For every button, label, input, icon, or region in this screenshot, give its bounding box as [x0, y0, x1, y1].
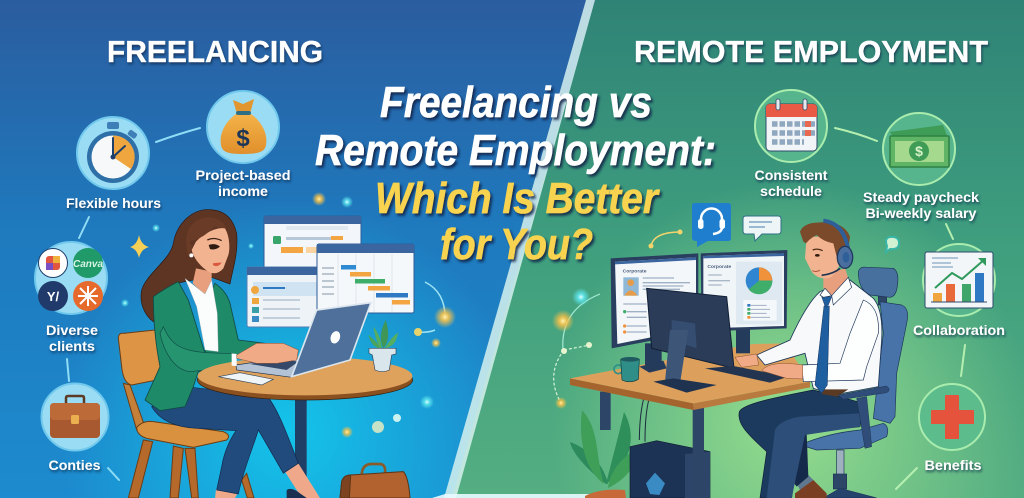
label: collaboration: Collaboration	[913, 322, 1005, 338]
label: benefits: Benefits	[924, 457, 982, 473]
bag on floor	[340, 464, 410, 498]
man: shirt	[757, 280, 882, 395]
heading: Freelancing: FREELANCING	[107, 34, 323, 69]
monitor: left: Corporate	[623, 269, 647, 275]
main title: for You?	[440, 220, 593, 269]
label: conties: Conties	[48, 457, 101, 473]
monitor: right: Corporate	[707, 264, 731, 270]
chair	[118, 330, 254, 498]
app window: top browser	[264, 216, 361, 276]
monitor: front rear view	[647, 288, 734, 393]
man: hands	[735, 354, 803, 379]
monitor: left	[611, 253, 698, 348]
woman: pants	[152, 387, 298, 494]
woman: neck	[193, 268, 212, 295]
potted plant	[368, 320, 398, 372]
icon: diverse client logos: Canva	[73, 259, 103, 270]
man: sock and shoe	[795, 473, 827, 498]
phone	[218, 373, 273, 385]
man: hair	[800, 222, 850, 257]
main title: Remote Employment:	[315, 126, 716, 175]
chair armrest	[838, 386, 889, 448]
label: consistent schedule	[754, 167, 828, 199]
icon: briefcase	[42, 384, 108, 450]
icon: medical cross	[919, 384, 985, 450]
icon: stopwatch	[77, 117, 149, 189]
label: project-based income	[196, 167, 290, 199]
laptop screen	[292, 303, 371, 377]
keyboard	[705, 366, 788, 383]
woman: blouse	[185, 278, 218, 352]
man: pants	[739, 390, 863, 498]
decorative glows right	[552, 230, 899, 409]
app window: gantt chart	[317, 244, 414, 313]
label: consistent schedule: Consistent	[754, 167, 828, 183]
computer tower	[630, 441, 710, 498]
laptop keyboard	[250, 358, 298, 370]
icon: cash	[883, 113, 955, 185]
label: diverse clients	[46, 322, 98, 354]
mug	[614, 357, 639, 382]
main title: Freelancing vs	[380, 78, 652, 127]
desk top	[570, 343, 810, 410]
laptop logo	[329, 330, 342, 345]
label: project-based income: Project-based	[196, 167, 290, 183]
man: sleeve	[802, 300, 878, 382]
label: steady paycheck bi-weekly salary: Steady paycheck	[863, 189, 979, 205]
woman: jacket	[145, 282, 267, 411]
main title	[315, 78, 716, 269]
label: project-based income: income	[218, 183, 268, 199]
icon: headset chat bubble	[692, 203, 731, 247]
main title: Which Is Better	[375, 174, 661, 223]
background: green remote side	[452, 0, 1024, 498]
desk plant	[570, 410, 638, 498]
woman: hair	[141, 210, 237, 323]
icon: money bag: $	[236, 125, 250, 152]
man: headset	[822, 221, 853, 275]
laptop base	[236, 357, 317, 377]
icon: diverse client logos	[35, 242, 107, 314]
table	[197, 357, 413, 400]
label: flexible hours: Flexible hours	[66, 195, 161, 211]
man: tie	[815, 297, 832, 393]
man: face	[805, 237, 840, 278]
connector lines right	[835, 128, 965, 489]
desk legs	[600, 392, 704, 498]
desk cables	[639, 373, 662, 442]
decorative sparkles left	[121, 192, 456, 438]
woman: front hair	[186, 217, 226, 257]
man: belt	[822, 389, 848, 397]
icon: growth chart card	[923, 244, 995, 316]
woman: hand and cuff	[232, 343, 298, 366]
monitor: right	[701, 250, 787, 353]
icon: cash: $	[915, 143, 923, 159]
diagonal divider	[432, 0, 595, 498]
table stem	[295, 398, 307, 478]
man: facial features	[812, 249, 823, 272]
man: collar	[820, 277, 852, 305]
icon: message bubble	[743, 216, 781, 241]
label: diverse clients: Diverse	[46, 322, 98, 338]
icon: diverse client logos: Y/	[47, 289, 60, 304]
office chair	[800, 267, 908, 498]
monitor: left stand	[639, 343, 667, 373]
woman: sleeve	[160, 327, 233, 372]
app window: profile list	[247, 267, 320, 327]
icon: money bag	[207, 91, 279, 163]
man: neck	[823, 268, 848, 295]
icon: calendar	[755, 90, 827, 162]
freelancer scene	[118, 210, 413, 498]
employee scene	[570, 221, 908, 498]
woman: facial features	[189, 238, 222, 266]
connector lines left	[67, 128, 200, 480]
label: diverse clients: clients	[49, 338, 95, 354]
label: steady paycheck bi-weekly salary: Bi-weekly salary	[866, 205, 977, 221]
label: steady paycheck bi-weekly salary	[863, 189, 979, 221]
woman: ankles and shoe	[215, 463, 320, 498]
woman: face	[192, 228, 229, 273]
label: consistent schedule: schedule	[760, 183, 822, 199]
heading: Remote Employment: REMOTE EMPLOYMENT	[634, 34, 988, 69]
